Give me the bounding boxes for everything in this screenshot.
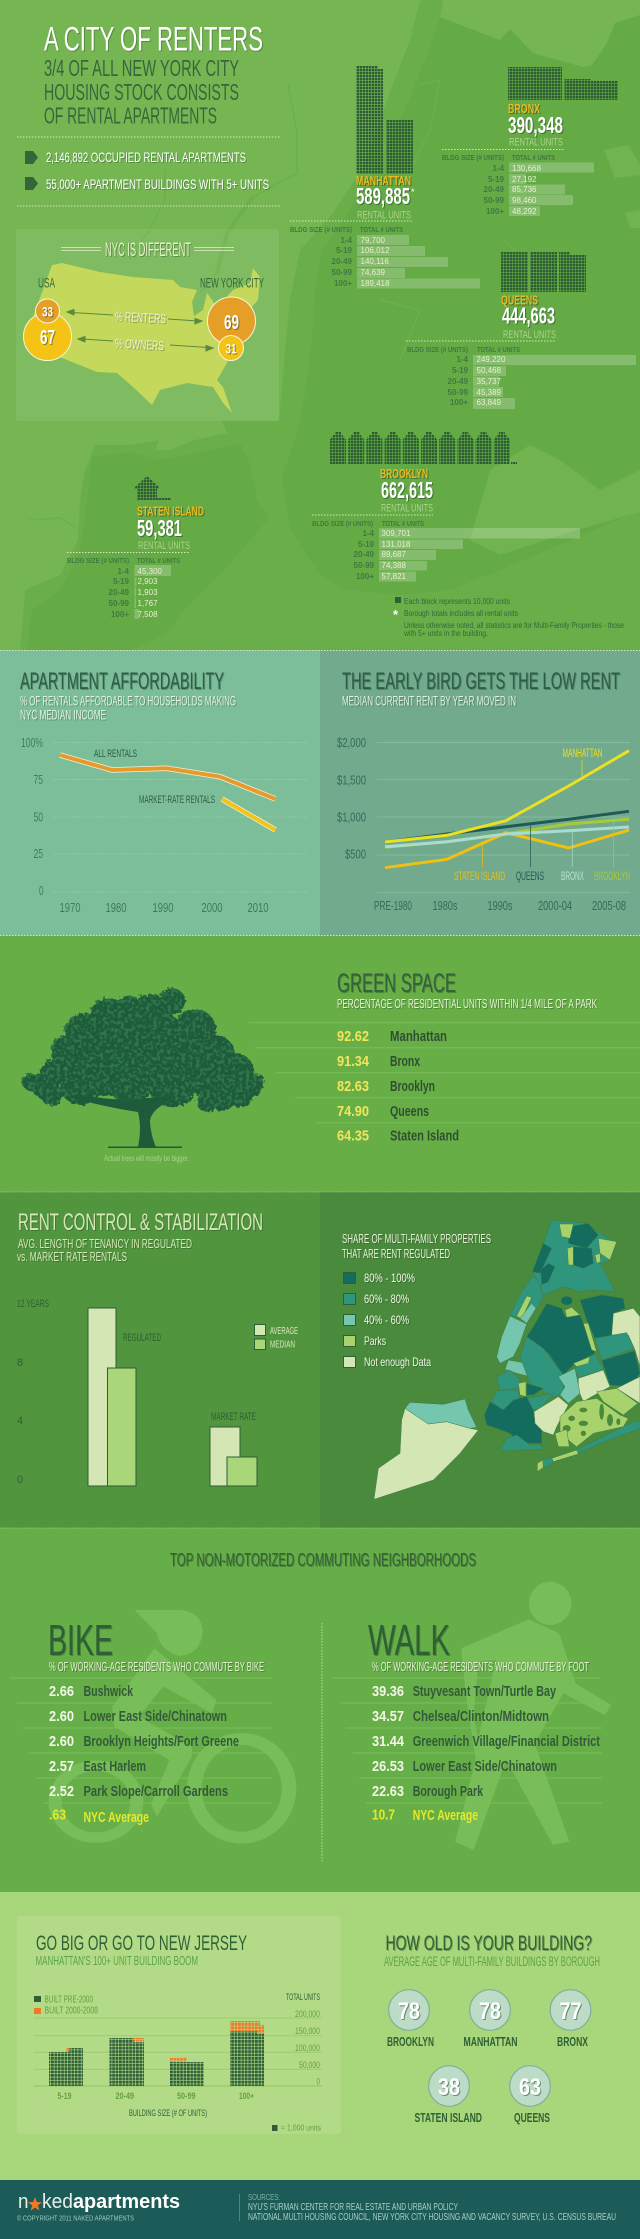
stat: Queens: 63: [519, 2074, 541, 2101]
borough: Manhattan: RENTAL UNITS: [357, 210, 411, 222]
list: park access by borough: Staten Island: [390, 1128, 459, 1144]
line chart: affordability: 0: [39, 883, 44, 898]
borough name: BROOKLYN: [380, 466, 428, 481]
table: building sizes: 20-49: [484, 185, 505, 194]
subheading: NYC MEDIAN INCOME: [20, 708, 106, 722]
table: building sizes: 100+: [450, 398, 468, 407]
panel: go big or go to New Jersey: [17, 1916, 341, 2134]
bar: market-rate median: [227, 1457, 257, 1486]
line: Staten Island: [385, 830, 629, 868]
circle: NYC owners 31: [218, 336, 244, 360]
unit key: = 1,000 units: [281, 2122, 321, 2132]
panel: how old is your building: [384, 1932, 600, 2125]
line chart: affordability: 1990: [152, 900, 174, 915]
subheading: % OF WORKING-AGE RESIDENTS WHO COMMUTE BY BIKE: [49, 1659, 264, 1674]
table: building sizes: 1-4: [340, 236, 353, 245]
panel: green space: [0, 936, 640, 1192]
circle: NYC owners 31: 31: [226, 340, 237, 356]
line chart: rent by move-in year: 1980s: [432, 898, 458, 913]
list: top bike neighborhoods: NYC Average: [84, 1810, 149, 1826]
table: building sizes: 20-49: [354, 550, 375, 559]
section: light green background: [0, 1892, 640, 2180]
table: building sizes: 249,220: [476, 355, 506, 364]
bar: regulated median: [108, 1368, 136, 1486]
borough name: MANHATTAN: [356, 173, 411, 188]
list: top walk neighborhoods: 39.36: [372, 1684, 404, 1700]
fact: apartment buildings: 55,000+ APARTMENT BUILDINGS WITH 5+ UNITS: [46, 176, 269, 192]
list: top walk neighborhoods: [372, 1684, 600, 1824]
bar: regulated average: [88, 1308, 116, 1486]
stat: Bronx: BRONX: [557, 2034, 588, 2049]
table: building sizes: 100+: [334, 279, 352, 288]
table: building sizes: TOTAL # UNITS: [477, 345, 520, 354]
table: building sizes: 27,192: [512, 175, 537, 184]
heading: A City of Renters: A CITY OF RENTERS: [44, 20, 263, 58]
sources: NYU'S FURMAN CENTER FOR REAL ESTATE AND URBAN POLICY: [248, 2202, 458, 2213]
list: park access by borough: 82.63: [337, 1079, 369, 1095]
note: multi-family definition: [403, 621, 624, 638]
label: USA: USA: [38, 276, 55, 290]
table: building sizes: 98,460: [512, 196, 537, 205]
logo: naked apartments: n: [18, 2191, 28, 2213]
panel: commuting neighborhoods: [0, 1528, 640, 1892]
total: 444,663: [502, 302, 555, 328]
stat: Manhattan: [464, 1990, 518, 2049]
list: park access by borough: Queens: [390, 1104, 429, 1120]
list: top bike neighborhoods: 2.66: [49, 1684, 74, 1700]
borough: Queens: [406, 252, 636, 409]
table: building sizes: 74,388: [382, 561, 407, 570]
list: top bike neighborhoods: East Harlem: [84, 1759, 146, 1775]
table: building sizes: 100+: [486, 207, 504, 216]
table: building sizes: [407, 345, 636, 409]
borough: Bronx: [442, 67, 618, 216]
table: building sizes: 57,821: [382, 572, 407, 581]
line chart: affordability: 1970: [60, 900, 80, 915]
heading: SHARE OF MULTI-FAMILY PROPERTIES: [342, 1231, 491, 1246]
map legend: 80% - 100%: [364, 1271, 415, 1285]
total: 59,381: [137, 515, 182, 541]
list: top walk neighborhoods: Lower East Side/Chinatown: [413, 1759, 557, 1775]
stat: Staten Island: STATEN ISLAND: [414, 2110, 482, 2125]
table: building sizes: 1,903: [138, 588, 158, 597]
table: building sizes: 79,700: [360, 236, 386, 245]
list: top walk neighborhoods: Borough Park: [413, 1784, 484, 1800]
table: building sizes: 35,737: [476, 377, 502, 386]
list: top walk neighborhoods: 34.57: [372, 1709, 404, 1725]
table: building sizes: 1-4: [362, 529, 375, 538]
chart legend: MEDIAN: [270, 1338, 295, 1350]
table: building sizes: 63,849: [476, 398, 502, 407]
column: bike: [10, 1616, 272, 1826]
table: building sizes: 140,116: [360, 257, 389, 266]
list: top bike neighborhoods: [49, 1684, 239, 1826]
logo: naked apartments: apartments: [73, 2191, 180, 2213]
waffle chart: units by building size: 50-99: [177, 2091, 196, 2102]
table: building sizes: 74,639: [360, 268, 386, 277]
line: Manhattan: [385, 751, 629, 842]
table: building sizes: BLDG SIZE (# UNITS): [442, 153, 504, 162]
circle: NYC renters 69: 69: [224, 312, 239, 334]
subheading: [17, 1236, 192, 1264]
unit key: [272, 2122, 321, 2132]
chart legend: BUILT 2000-2008: [44, 2006, 98, 2016]
table: building sizes: 7,508: [138, 610, 158, 619]
circle: NYC renters 69: [208, 297, 256, 345]
bars: pre-2000: [49, 2032, 264, 2086]
logo: naked apartments: [18, 2191, 180, 2213]
borough name: QUEENS: [501, 292, 538, 308]
stat: Manhattan: MANHATTAN: [464, 2034, 518, 2049]
bars: 2000-2008: [66, 2021, 264, 2062]
stat: Staten Island: 38: [438, 2074, 460, 2101]
line: Brooklyn: [385, 819, 629, 847]
bar chart: tenancy length: 8: [17, 1357, 23, 1369]
line chart: affordability: 100%: [21, 735, 43, 750]
map: New York City neighborhoods: [374, 1220, 640, 1499]
label: % renters: % RENTERS: [115, 309, 167, 326]
waffle chart: units by building size: 200,000: [295, 2009, 320, 2020]
table: building sizes: 1-4: [456, 355, 469, 364]
heading: TOP NON-MOTORIZED COMMUTING NEIGHBORHOODS: [170, 1550, 476, 1570]
table: building sizes: [442, 153, 594, 216]
label: Queens: QUEENS: [516, 871, 544, 883]
subtitle: housing stock: [44, 55, 239, 128]
icon: arrow bullet: [25, 151, 38, 164]
subtitle: housing stock: 3/4 OF ALL NEW YORK CITY: [44, 55, 239, 81]
line chart: affordability: 2010: [248, 900, 268, 915]
list: park access by borough: 74.90: [337, 1104, 369, 1120]
logo: naked apartments: ked: [42, 2191, 73, 2213]
borough: Staten Island: [67, 476, 204, 619]
icon: house of unit blocks: [135, 476, 171, 500]
borough: Bronx: RENTAL UNITS: [509, 136, 563, 148]
table: building sizes: BLDG SIZE (# UNITS): [407, 345, 468, 354]
unit blocks: [501, 252, 586, 292]
table: building sizes: TOTAL # UNITS: [382, 519, 424, 528]
list: top bike neighborhoods: Park Slope/Carroll Gardens: [84, 1784, 228, 1800]
sources: SOURCES:: [248, 2192, 280, 2202]
line chart: affordability: 1980: [106, 900, 126, 915]
label: all rentals: ALL RENTALS: [94, 748, 137, 760]
line chart: affordability: [21, 735, 307, 915]
table: building sizes: 130,668: [512, 164, 541, 173]
subheading: AVG. LENGTH OF TENANCY IN REGULATED: [18, 1236, 192, 1251]
total: 662,615: [381, 477, 433, 503]
borough: Manhattan: [290, 66, 480, 288]
panel heading: [61, 240, 234, 261]
stat: Queens: [510, 2066, 550, 2125]
line: all rentals: [60, 755, 276, 799]
note: multi-family definition: with 5+ units in the building.: [403, 629, 488, 638]
subheading: vs. MARKET RATE RENTALS: [17, 1249, 127, 1264]
list: top walk neighborhoods: 26.53: [372, 1759, 404, 1775]
label: New York City: NEW YORK CITY: [200, 276, 264, 290]
subheading: MANHATTAN'S 100+ UNIT BUILDING BOOM: [36, 1953, 198, 1968]
label: market-rate rentals: MARKET-RATE RENTALS: [139, 794, 215, 806]
table: building sizes: 5-19: [358, 540, 375, 549]
stat: Brooklyn: BROOKLYN: [387, 2034, 434, 2049]
arrows: renters and owners: [67, 310, 213, 351]
line chart: rent by move-in year: 2000-04: [538, 898, 572, 913]
list: top bike neighborhoods: 2.57: [49, 1759, 74, 1775]
list: top walk neighborhoods: 22.63: [372, 1784, 404, 1800]
axis title: BUILDING SIZE (# OF UNITS): [129, 2108, 207, 2119]
chart legend: [34, 1994, 98, 2016]
borough name: BRONX: [508, 101, 540, 116]
heading: [342, 1231, 491, 1261]
panel: rent regulation map: [320, 1192, 640, 1528]
list: top bike neighborhoods: Lower East Side/Chinatown: [84, 1709, 227, 1725]
panel heading: NYC IS DIFFERENT: [105, 240, 191, 261]
borough name: STATEN ISLAND: [137, 504, 204, 518]
map legend: 60% - 80%: [364, 1292, 409, 1306]
icon: cyclist: [55, 1610, 289, 1838]
line: Bronx: [385, 827, 629, 847]
unit blocks: [356, 66, 413, 174]
line chart: rent by move-in year: $500: [345, 846, 366, 862]
table: building sizes: 50-99: [484, 196, 505, 205]
table: building sizes: 2,903: [138, 577, 158, 586]
table: building sizes: 48,292: [512, 207, 537, 216]
table: building sizes: TOTAL # UNITS: [137, 556, 180, 565]
list: park access by borough: [337, 1029, 459, 1144]
circle: USA renters 33: 33: [42, 304, 53, 320]
sources: [248, 2192, 616, 2223]
table: building sizes: BLDG SIZE (# UNITS): [67, 556, 129, 565]
fact: occupied rental apartments: 2,146,892 OCCUPIED RENTAL APARTMENTS: [46, 149, 246, 165]
stat: Brooklyn: [387, 1990, 434, 2049]
table: building sizes: 131,018: [382, 540, 411, 549]
circle: USA renters 33: [36, 299, 60, 323]
column: walk: [333, 1616, 602, 1824]
table: building sizes: 20-49: [448, 377, 469, 386]
list: park access by borough: 64.35: [337, 1128, 369, 1144]
stat: Bronx: [550, 1990, 591, 2049]
table: building sizes: 20-49: [109, 588, 130, 597]
table: building sizes: 189,418: [360, 279, 390, 288]
icon: asterisk: *: [393, 607, 399, 622]
bar chart: tenancy length: 4: [17, 1415, 23, 1427]
panel: early bird rent: [320, 650, 640, 936]
heading: BIKE: [48, 1616, 113, 1665]
table: building sizes: 50-99: [448, 388, 469, 397]
subtitle: housing stock: HOUSING STOCK CONSISTS: [44, 79, 239, 105]
table: building sizes: 45,300: [138, 567, 163, 576]
list: top bike neighborhoods: Brooklyn Heights/Fort Greene: [84, 1734, 239, 1750]
table: building sizes: BLDG SIZE (# UNITS): [290, 225, 352, 234]
list: top bike neighborhoods: .63: [49, 1808, 66, 1824]
heading: WALK: [368, 1616, 450, 1665]
line chart: rent by move-in year: PRE-1980: [374, 898, 412, 913]
list: top walk neighborhoods: NYC Average: [413, 1808, 478, 1824]
list: park access by borough: 92.62: [337, 1029, 369, 1045]
line: Queens: [385, 811, 629, 842]
table: building sizes: 106,012: [360, 246, 390, 255]
table: building sizes: TOTAL # UNITS: [360, 225, 403, 234]
stat: Bronx: 77: [560, 1998, 582, 2025]
heading: THAT ARE RENT REGULATED: [342, 1246, 450, 1261]
heading: APARTMENT AFFORDABILITY: [20, 668, 224, 695]
subheading: [20, 694, 236, 722]
bar chart: tenancy length: 12 YEARS: [17, 1298, 49, 1310]
borough: Queens: RENTAL UNITS: [503, 329, 556, 341]
stat: Manhattan: 78: [479, 1998, 501, 2025]
footer: [0, 2180, 640, 2239]
heading: RENT CONTROL & STABILIZATION: [18, 1209, 263, 1236]
icon: walker: [455, 1582, 611, 1850]
tree caption: Actual trees will mostly be bigger.: [104, 1154, 189, 1163]
label: market rate: MARKET RATE: [211, 1411, 256, 1423]
table: building sizes: 5-19: [336, 246, 353, 255]
unit blocks: [508, 67, 618, 100]
line chart: affordability: 75: [34, 772, 43, 787]
section: borough map background: [0, 0, 640, 651]
line chart: rent by move-in year: $1,000: [337, 810, 366, 824]
panel: rent control and stabilization: [0, 1192, 320, 1528]
table: building sizes: TOTAL # UNITS: [512, 153, 555, 162]
note: borough totals: Borough totals includes all rental units: [404, 609, 518, 618]
table: building sizes: 1-4: [492, 164, 505, 173]
table: building sizes: 5-19: [452, 366, 469, 375]
list: top bike neighborhoods: 2.60: [49, 1709, 74, 1725]
map legend: [344, 1271, 431, 1369]
list: top walk neighborhoods: 10.7: [372, 1808, 395, 1824]
waffle chart: units by building size: [34, 1992, 322, 2132]
subheading: MEDIAN CURRENT RENT BY YEAR MOVED IN: [342, 694, 516, 708]
table: building sizes: 1,767: [138, 599, 158, 608]
circle: USA owners 67: [24, 312, 72, 360]
subheading: % OF RENTALS AFFORDABLE TO HOUSEHOLDS MAKING: [20, 694, 236, 708]
table: building sizes: [290, 225, 480, 288]
icon: unit block: [395, 597, 401, 603]
table: building sizes: 50-99: [109, 599, 130, 608]
total: 589,885: [356, 183, 410, 209]
table: building sizes: 50-99: [354, 561, 375, 570]
list: park access by borough: Manhattan: [390, 1029, 447, 1045]
list: top walk neighborhoods: Chelsea/Clinton/Midtown: [413, 1709, 549, 1725]
borough: Brooklyn: [312, 432, 580, 582]
label: % owners: % OWNERS: [115, 336, 165, 353]
list: top bike neighborhoods: 2.60: [49, 1734, 74, 1750]
chart legend: [254, 1324, 298, 1350]
list: top walk neighborhoods: 31.44: [372, 1734, 404, 1750]
table: building sizes: 89,687: [382, 550, 407, 559]
stat: Brooklyn: 78: [398, 1998, 420, 2025]
label: Staten Island: STATEN ISLAND: [454, 871, 505, 883]
key facts list: [25, 149, 269, 192]
table: building sizes: 50,468: [476, 366, 502, 375]
table: building sizes: [67, 556, 180, 619]
line chart: rent by move-in year: $2,000: [337, 735, 366, 750]
illustration: tree: [22, 988, 264, 1148]
heading: GO BIG OR GO TO NEW JERSEY: [36, 1932, 247, 1955]
map legend: Not enough Data: [364, 1355, 431, 1369]
heading: GREEN SPACE: [337, 968, 456, 998]
table: building sizes: 5-19: [488, 175, 505, 184]
stat: Staten Island: [414, 2066, 482, 2125]
line: market-rate rentals: [222, 799, 276, 830]
panel: apartment affordability: [0, 650, 320, 936]
waffle chart: units by building size: 20-49: [116, 2091, 134, 2102]
panel: NYC is different: [16, 229, 279, 421]
list: park access by borough: Bronx: [390, 1054, 420, 1070]
bar chart: tenancy length: [17, 1298, 298, 1486]
bar chart: tenancy length: 0: [17, 1474, 23, 1486]
list: top bike neighborhoods: 2.52: [49, 1784, 74, 1800]
borough: Manhattan: *: [411, 187, 415, 197]
table: building sizes: 45,389: [476, 388, 502, 397]
stat: Queens: QUEENS: [514, 2110, 550, 2125]
chart legend: AVERAGE: [270, 1325, 298, 1337]
waffle chart: units by building size: 100,000: [295, 2043, 320, 2054]
map legend and notes: [393, 597, 624, 638]
label: Manhattan: MANHATTAN: [562, 748, 602, 760]
table: building sizes: BLDG SIZE (# UNITS): [312, 519, 373, 528]
leader lines: [581, 760, 583, 776]
icon: arrow bullet: [25, 177, 38, 190]
line chart: affordability: 25: [34, 846, 43, 861]
table: building sizes: 309,701: [382, 529, 411, 538]
list: park access by borough: Brooklyn: [390, 1079, 435, 1095]
borough: Staten Island: RENTAL UNITS: [138, 540, 190, 552]
waffle chart: units by building size: 0: [316, 2076, 320, 2088]
table: building sizes: 1-4: [117, 567, 130, 576]
borough: Brooklyn: RENTAL UNITS: [381, 502, 433, 514]
list: top bike neighborhoods: Bushwick: [84, 1684, 134, 1700]
table: building sizes: 100+: [356, 572, 374, 581]
line chart: affordability: 2000: [202, 900, 222, 915]
line chart: affordability: 50: [34, 810, 43, 824]
map: United States: [33, 263, 260, 413]
subtitle: housing stock: OF RENTAL APARTMENTS: [44, 102, 217, 128]
map legend: 40% - 60%: [364, 1313, 409, 1327]
chart legend: BUILT PRE-2000: [44, 1994, 93, 2006]
circle: USA owners 67: 67: [40, 327, 55, 349]
note: block scale: Each block represents 10,000 units: [404, 597, 510, 606]
copyright: © COPYRIGHT 2011 NAKED APARTMENTS: [17, 2214, 134, 2222]
label: Bronx: BRONX: [561, 871, 584, 883]
line chart: rent by move-in year: 2005-08: [592, 898, 626, 913]
line chart: rent by move-in year: 1990s: [488, 898, 513, 913]
total: 390,348: [508, 112, 563, 138]
list: park access by borough: 91.34: [337, 1054, 369, 1070]
table: building sizes: [312, 519, 580, 582]
table: building sizes: 85,736: [512, 185, 537, 194]
map legend: Parks: [364, 1334, 386, 1348]
table: building sizes: 20-49: [332, 257, 353, 266]
table: building sizes: 5-19: [113, 577, 130, 586]
list: top walk neighborhoods: Stuyvesant Town/Turtle Bay: [413, 1684, 556, 1700]
waffle chart: units by building size: 100+: [239, 2091, 254, 2102]
unit blocks: [330, 432, 517, 464]
table: building sizes: 100+: [111, 610, 129, 619]
line chart: rent by move-in year: $1,500: [337, 772, 366, 788]
waffle chart: units by building size: 5-19: [58, 2091, 72, 2102]
line chart: rent by move-in year: [337, 735, 630, 913]
label: regulated: REGULATED: [123, 1332, 161, 1344]
waffle chart: units by building size: TOTAL UNITS: [286, 1992, 320, 2003]
table: building sizes: 50-99: [332, 268, 353, 277]
waffle chart: units by building size: 150,000: [295, 2026, 320, 2037]
bar: market-rate average: [210, 1427, 240, 1486]
waffle chart: units by building size: 50,000: [299, 2060, 320, 2071]
